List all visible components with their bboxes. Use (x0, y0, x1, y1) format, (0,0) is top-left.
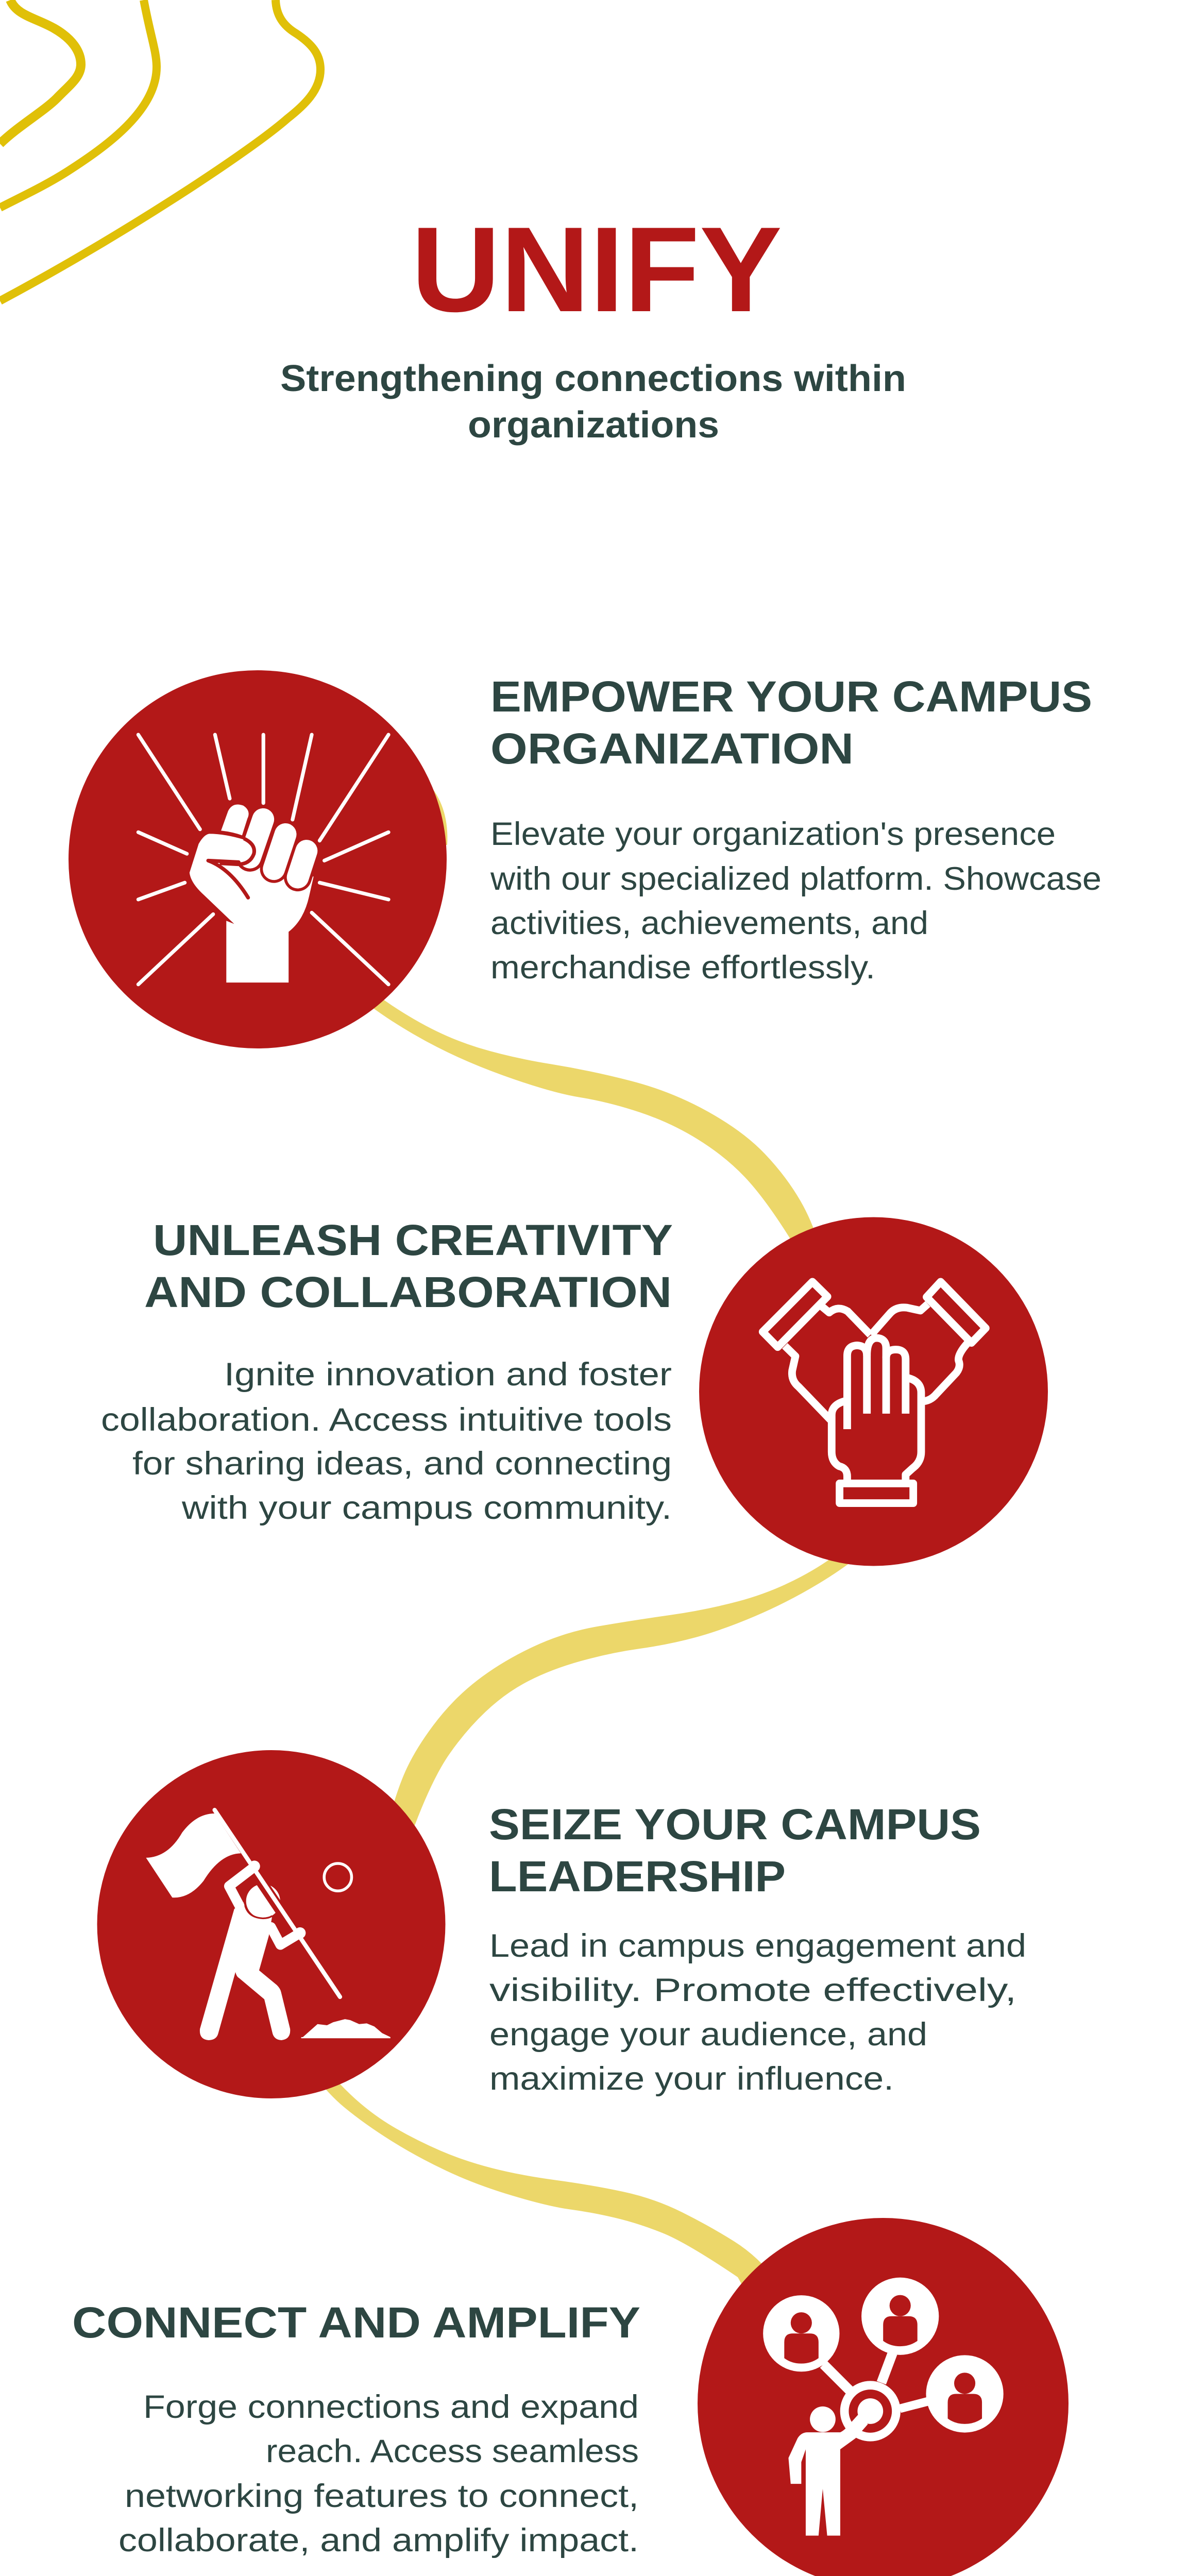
text block: connect: networking features to connect, (125, 2478, 639, 2514)
heading: unleash: UNLEASH CREATIVITY (153, 1216, 673, 1264)
text block: empower: merchandise effortlessly. (490, 950, 875, 986)
text block: connect: collaborate, and amplify impact. (118, 2522, 639, 2558)
heading: seize (489, 1800, 981, 1901)
heading: unleash (144, 1216, 673, 1316)
circle icon: person planting flag (97, 1750, 445, 2098)
decorative curves: top left (0, 0, 320, 301)
circle icon: raised fist (69, 670, 447, 1048)
text block: seize: Lead in campus engagement and (489, 1928, 1026, 1964)
text block: connect: reach. Access seamless (266, 2433, 639, 2469)
text block: unleash: collaboration. Access intuitive tools (101, 1402, 672, 1438)
text block: empower: with our specialized platform. Showcase (490, 861, 1101, 897)
text block: connect: Forge connections and expand (143, 2389, 639, 2425)
subtitle: Strengthening connections within (280, 358, 906, 399)
text block: unleash: Ignite innovation and foster (224, 1357, 672, 1393)
text block: empower (490, 816, 1101, 986)
subtitle (280, 358, 906, 446)
heading: unleash: AND COLLABORATION (144, 1268, 672, 1316)
title: UNIFY (411, 201, 782, 337)
text block: seize: engage your audience, and (489, 2016, 927, 2053)
heading: seize: SEIZE YOUR CAMPUS (489, 1800, 981, 1849)
heading: seize: LEADERSHIP (489, 1852, 786, 1901)
text block: seize: maximize your influence. (489, 2061, 894, 2097)
subtitle: organizations (468, 404, 719, 446)
text block: unleash: for sharing ideas, and connecting (132, 1446, 672, 1482)
circle icon: joined hands (699, 1217, 1048, 1566)
text block: connect (118, 2389, 639, 2558)
circle icon: network of people (698, 2218, 1069, 2576)
connector ribbons (304, 786, 871, 2303)
text block: unleash: with your campus community. (181, 1490, 672, 1526)
heading: empower: ORGANIZATION (490, 724, 854, 773)
heading: connect: CONNECT AND AMPLIFY (72, 2298, 640, 2347)
text block: unleash (101, 1357, 672, 1526)
text block: seize: visibility. Promote effectively, (489, 1972, 1016, 2008)
heading: empower (490, 672, 1092, 773)
text block: seize (489, 1928, 1026, 2097)
text block: empower: activities, achievements, and (490, 905, 928, 941)
heading: empower: EMPOWER YOUR CAMPUS (490, 672, 1092, 721)
text block: empower: Elevate your organization's presence (490, 816, 1056, 852)
